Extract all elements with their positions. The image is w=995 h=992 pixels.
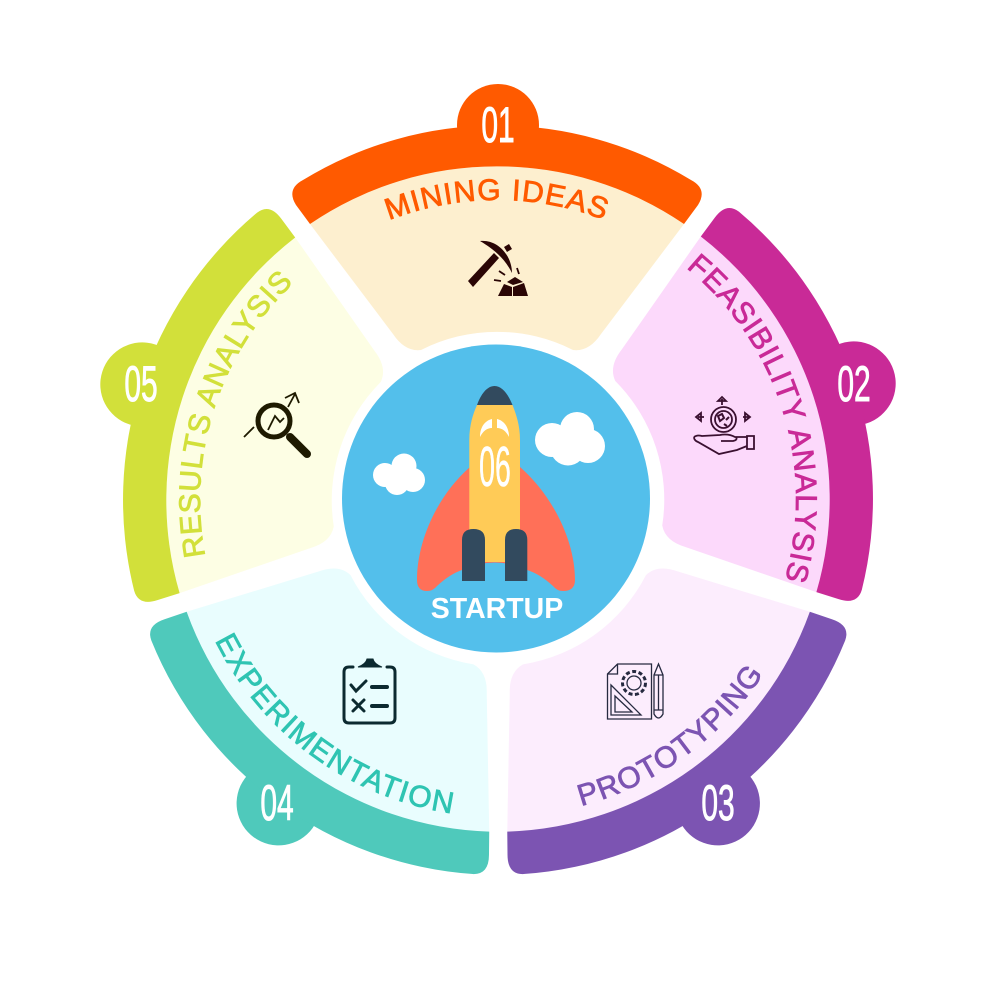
heading: mining ideas: MINING IDEAS — [384, 178, 608, 220]
number 01: 01 — [481, 97, 515, 153]
number 04: 04 — [260, 775, 294, 831]
icon: rocket — [417, 386, 575, 591]
icon: checklist clipboard — [344, 659, 395, 723]
cloud: right — [535, 412, 605, 466]
panel: 01 mining ideas — [292, 84, 702, 350]
sector background — [153, 510, 563, 878]
sector background — [581, 219, 871, 631]
panel: 02 feasibility analysis — [613, 208, 896, 601]
band with number tab — [39, 176, 301, 611]
heading: results analysis: RESULTS ANALYSIS — [178, 272, 291, 558]
band with number tab — [292, 84, 702, 224]
panel: central startup rocket — [342, 344, 650, 652]
icon: magnifier over chart — [244, 393, 307, 454]
number 06: 06 — [479, 434, 511, 499]
band with number tab — [87, 601, 504, 958]
number 03: 03 — [701, 775, 735, 831]
icon: hand holding globe — [694, 397, 754, 454]
panel: 03 prototyping — [507, 568, 846, 874]
cloud: left — [373, 454, 425, 495]
icon: pickaxe and rock — [468, 241, 528, 296]
sector background — [433, 510, 844, 878]
heading: prototyping: PROTOTYPING — [577, 666, 760, 806]
center circle — [342, 344, 650, 652]
heading: experimentation: EXPERIMENTATION — [215, 632, 454, 814]
number 05: 05 — [124, 356, 158, 412]
sector background — [310, 166, 684, 350]
sector background — [125, 220, 415, 632]
icon: blueprint and pencil — [608, 664, 663, 719]
panel: 05 results analysis — [100, 209, 383, 602]
panel: 04 experimentation — [150, 568, 490, 874]
number 02: 02 — [837, 356, 871, 412]
heading: feasibility analysis: FEASIBILITY ANALYSIS — [688, 253, 818, 582]
band with number tab — [492, 601, 909, 958]
heading: startup: STARTUP — [431, 593, 563, 625]
band with number tab — [695, 175, 957, 610]
